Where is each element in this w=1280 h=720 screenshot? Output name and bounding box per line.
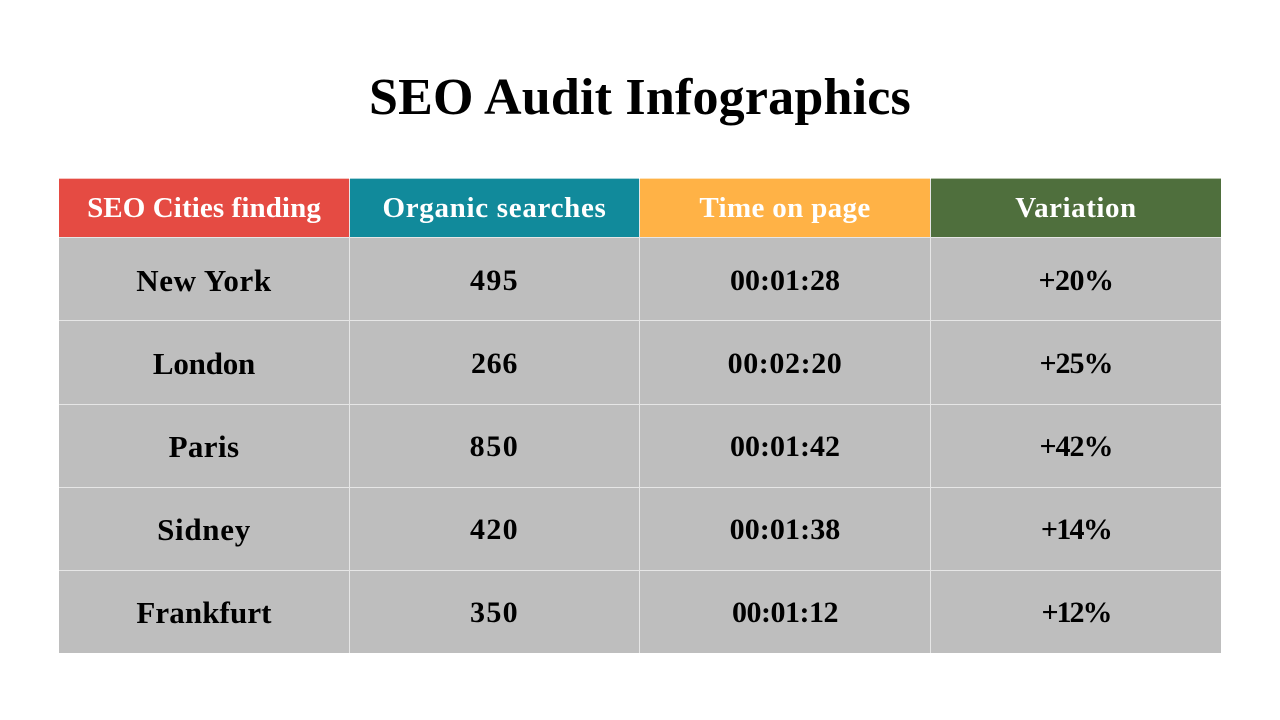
Paris time xyxy=(640,405,930,487)
Paris variation: +42% xyxy=(1039,430,1113,463)
cell: London xyxy=(59,321,349,404)
cell: Paris: Paris xyxy=(169,429,239,464)
Sidney searches xyxy=(350,488,639,570)
header: SEO Cities finding xyxy=(59,179,349,237)
London time xyxy=(640,321,930,404)
New York searches: 495 xyxy=(470,264,519,297)
header: Organic searches xyxy=(350,179,639,237)
cell: New York: New York xyxy=(136,263,272,298)
Paris searches: 850 xyxy=(470,430,519,463)
New York searches xyxy=(350,238,639,320)
header: Time on page xyxy=(640,179,930,237)
cell: Frankfurt xyxy=(59,571,349,653)
cell: New York xyxy=(59,238,349,320)
London searches xyxy=(350,321,639,404)
Frankfurt searches xyxy=(350,571,639,653)
Paris time: 00:01:42 xyxy=(730,430,840,463)
Frankfurt time: 00:01:12 xyxy=(732,596,838,629)
table xyxy=(59,179,1221,653)
Sidney time xyxy=(640,488,930,570)
cell: Paris xyxy=(59,405,349,487)
Frankfurt time xyxy=(640,571,930,653)
Sidney searches: 420 xyxy=(470,513,519,546)
Frankfurt searches: 350 xyxy=(470,596,519,629)
Sidney time: 00:01:38 xyxy=(730,513,840,546)
Sidney variation: +14% xyxy=(1041,513,1111,546)
header: Variation: Variation xyxy=(1015,192,1137,224)
header: Variation xyxy=(931,179,1221,237)
Paris searches xyxy=(350,405,639,487)
cell: Sidney xyxy=(59,488,349,570)
title: SEO Audit Infographics xyxy=(369,69,911,126)
Sidney variation xyxy=(931,488,1221,570)
London variation: +25% xyxy=(1039,347,1113,380)
header: Organic searches: Organic searches xyxy=(382,192,607,224)
New York time: 00:01:28 xyxy=(730,264,840,297)
New York variation: +20% xyxy=(1038,264,1114,297)
London searches: 266 xyxy=(471,347,518,380)
Paris variation xyxy=(931,405,1221,487)
header: Time on page: Time on page xyxy=(699,192,871,224)
London variation xyxy=(931,321,1221,404)
Frankfurt variation xyxy=(931,571,1221,653)
New York time xyxy=(640,238,930,320)
Frankfurt variation: +12% xyxy=(1041,596,1111,629)
header: SEO Cities finding: SEO Cities finding xyxy=(87,192,321,224)
cell: Sidney: Sidney xyxy=(157,512,251,547)
New York variation xyxy=(931,238,1221,320)
London time: 00:02:20 xyxy=(728,347,842,380)
cell: Frankfurt: Frankfurt xyxy=(136,595,272,630)
cell: London: London xyxy=(153,346,255,381)
